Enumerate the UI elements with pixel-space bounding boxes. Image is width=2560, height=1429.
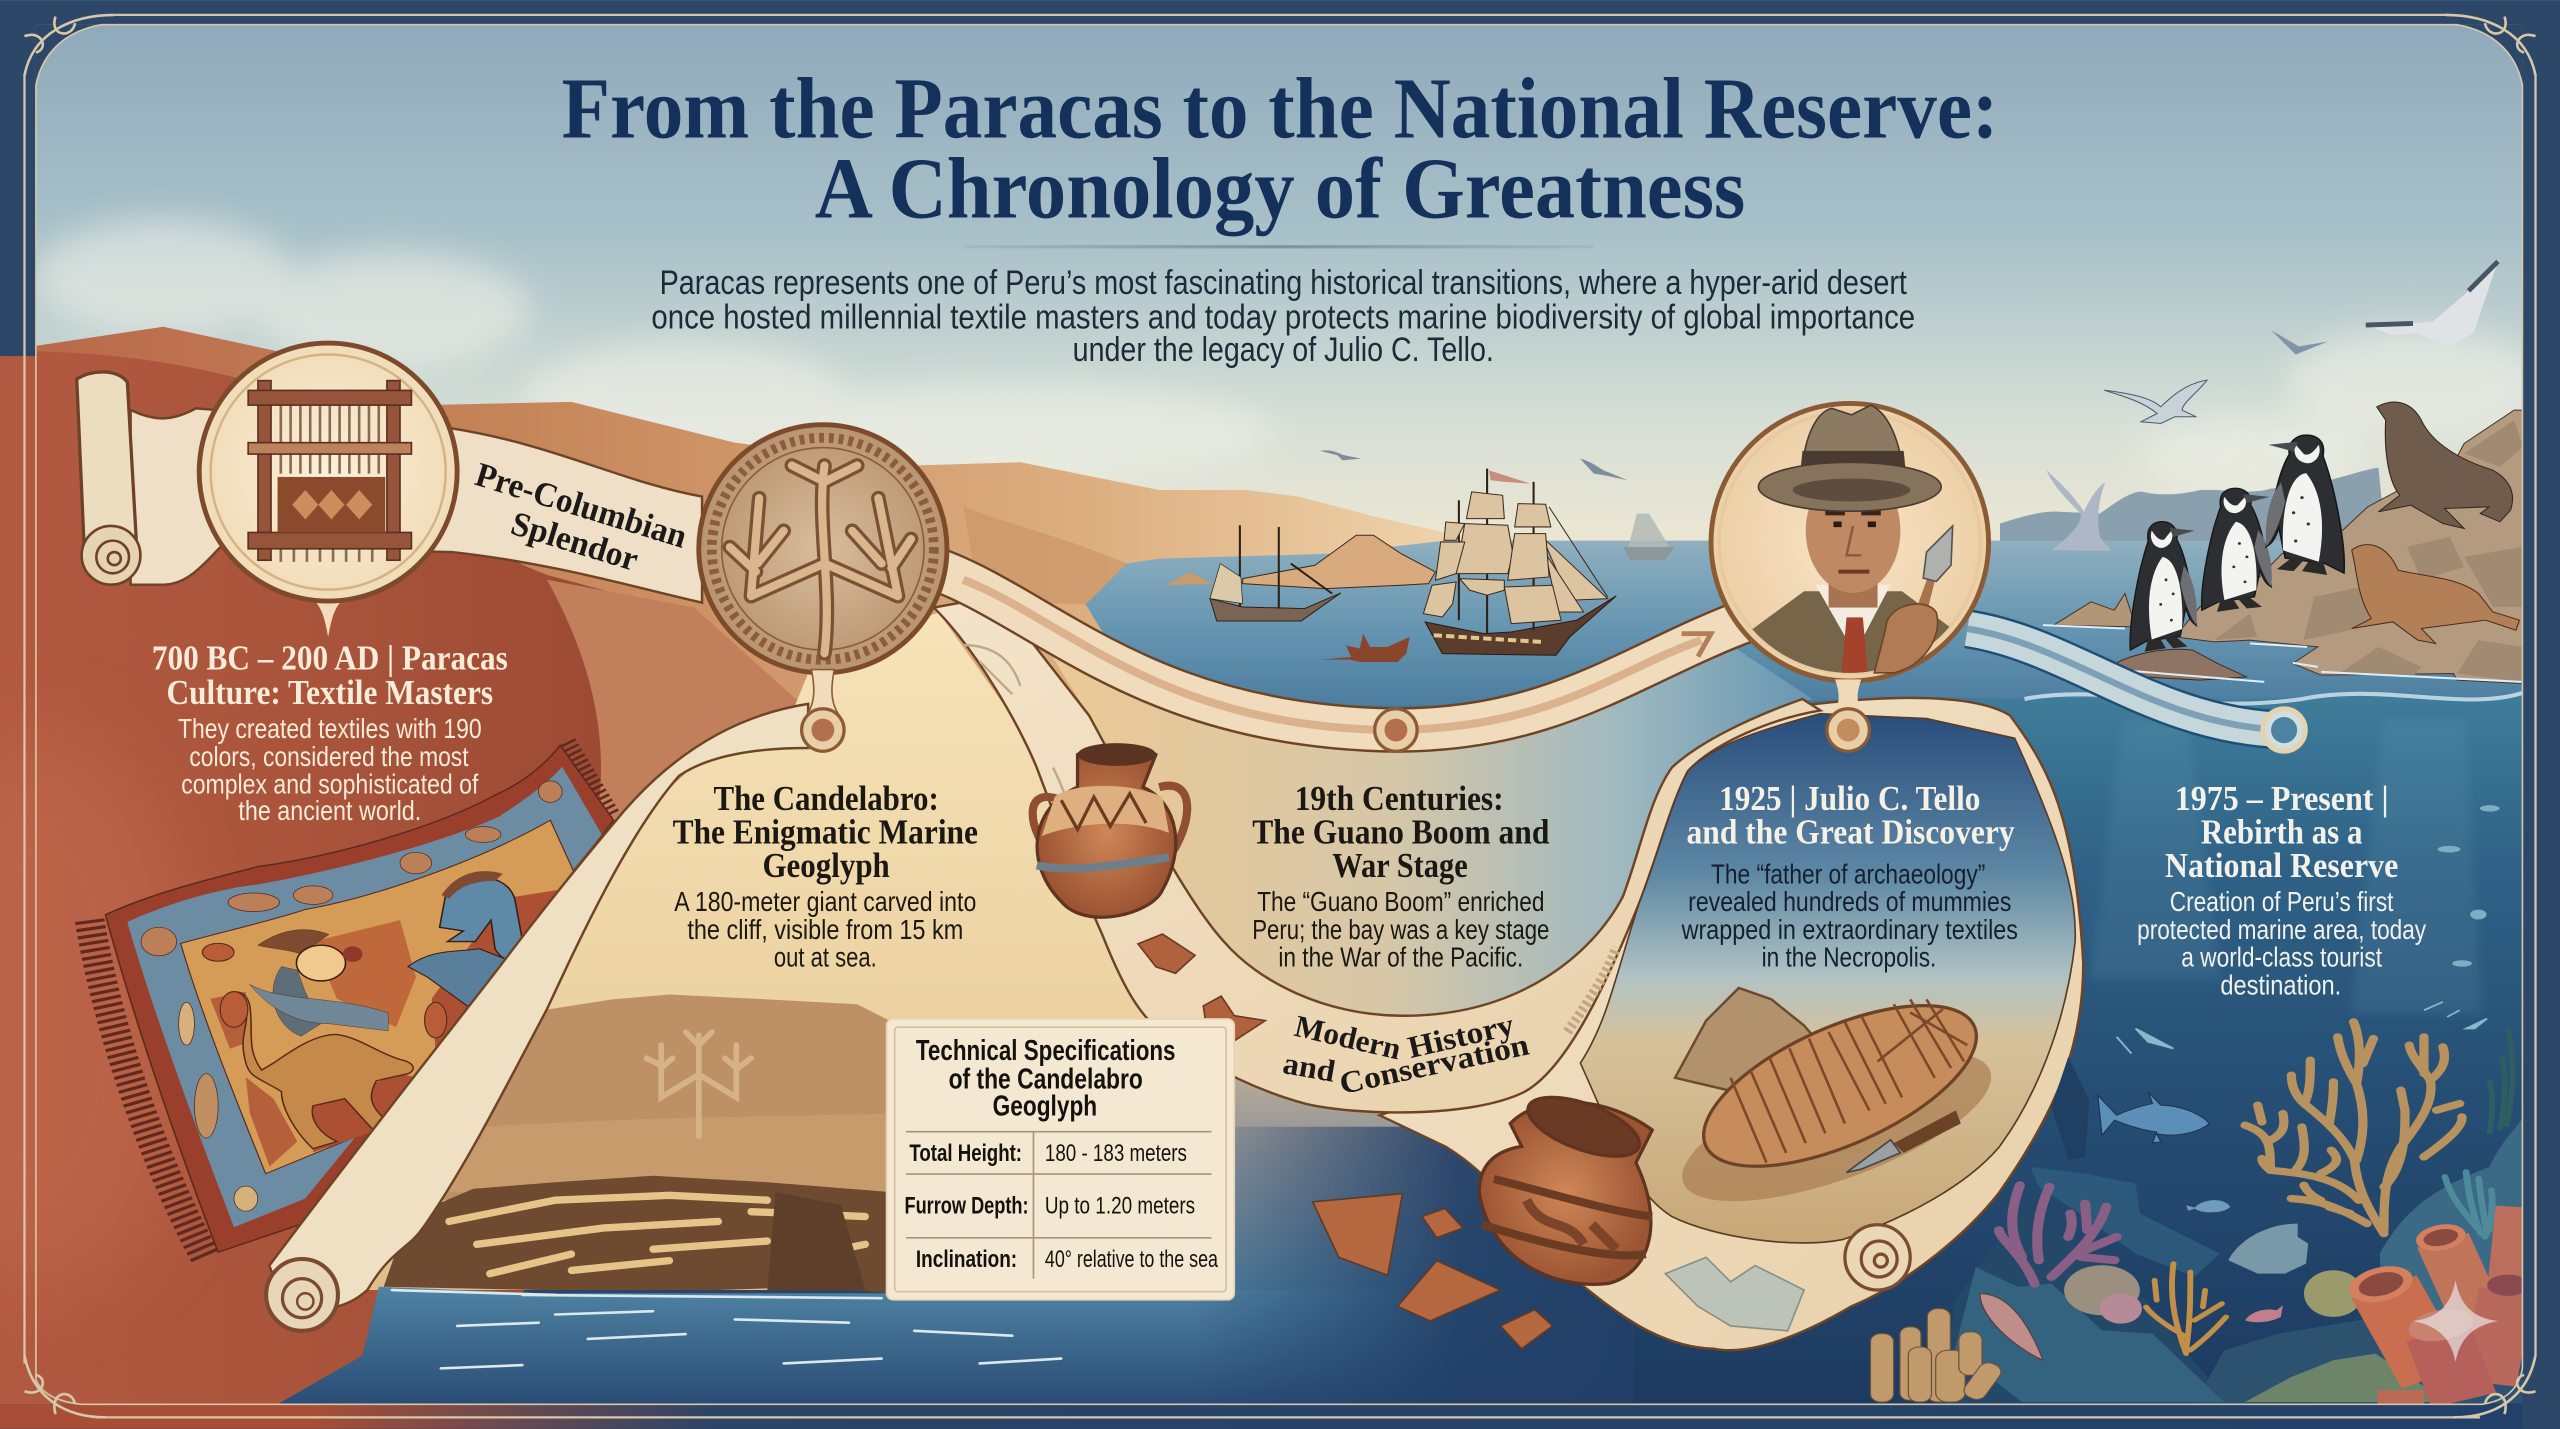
text block: 1925: [1681, 779, 2018, 973]
candelabra trident: [730, 466, 911, 653]
label: Modern History and Conservation: Modern: [1291, 1008, 1404, 1066]
sky background: [0, 0, 2560, 563]
penguin rock: [2112, 649, 2246, 680]
fish gray: [2228, 1224, 2308, 1274]
scroll curl: [266, 1259, 338, 1331]
beast head: [296, 945, 345, 981]
title: A Chronology of Greatness: [815, 140, 1745, 236]
facial features: [1825, 511, 1881, 514]
connector drip: [807, 670, 839, 715]
ribbon: pre-columbian band: [77, 372, 702, 603]
band: Modern History: [934, 596, 1820, 1112]
band motifs: [141, 781, 562, 1211]
underwater body: [1143, 693, 2531, 1408]
text block: 1925: in the Necropolis.: [1762, 942, 1936, 973]
neck and face: [1828, 584, 1878, 608]
scroll curl right: [1845, 1225, 1910, 1290]
text block: Candelabro: The Candelabro:: [713, 779, 939, 818]
wave highlights: [392, 1290, 1061, 1368]
sand crater under mummy: [1665, 1022, 2008, 1232]
rug blue band: [127, 767, 602, 1227]
table rows: 180 - 183 meters: [1045, 1141, 1187, 1167]
purple coral: [1999, 1185, 2117, 1284]
second figure body: [408, 949, 507, 1006]
shards lower: [1313, 1194, 1553, 1349]
woven cloth: [278, 477, 385, 532]
orange coral: [2146, 1264, 2226, 1354]
map sketch on band: [963, 645, 1086, 866]
darker cliff strata on the bay: [963, 506, 1127, 604]
text block: Candelabro: the cliff, visible from 15 km: [687, 914, 963, 945]
fish pink large: [1980, 1294, 2043, 1360]
scroll band over the textile: [266, 704, 808, 1331]
table rows: 40° relative to the sea: [1045, 1247, 1219, 1273]
penguin 1: [2130, 522, 2197, 652]
feather on band: [1567, 947, 1616, 1032]
timeline nodes: [802, 679, 2305, 751]
lower fill under band: [1110, 1045, 1633, 1408]
text block: 1975: Rebirth as a: [2201, 812, 2363, 851]
title: [562, 60, 1998, 236]
yellow sponge cluster: [2304, 1270, 2363, 1317]
table rows: Inclination:: [916, 1247, 1017, 1273]
hat: [1802, 405, 1904, 477]
clouds: [33, 219, 2547, 497]
table rows: Up to 1.20 meters: [1045, 1193, 1195, 1219]
card heading: Geoglyph: [993, 1090, 1097, 1122]
hill lower lighter slope: [428, 1114, 890, 1192]
node 1: [802, 709, 844, 751]
label: Modern History and Conservation: [1280, 1007, 1532, 1101]
text block: 1975: Creation of Peru’s first: [2170, 886, 2394, 917]
table rows: [904, 1141, 1219, 1273]
table rows: Total Height:: [909, 1141, 1022, 1167]
beast mane: [273, 967, 321, 1036]
text block: Candelabro: out at sea.: [774, 942, 877, 973]
foam: [2043, 625, 2521, 682]
label: Modern History and Conservation: History: [1404, 1007, 1518, 1065]
label: Pre-Columbian Splendor: Pre-Columbian: [471, 455, 691, 556]
seabird small: [2271, 330, 2328, 354]
pottery shards on band: [1138, 934, 1265, 1045]
text block: 1925: 1925 | Julio C. Tello: [1719, 779, 1980, 818]
sea at cliffs: [278, 1287, 1633, 1404]
bottom band: [0, 1404, 2560, 1429]
text block: 1975: protected marine area, today: [2137, 914, 2426, 945]
fish above reef: [2438, 805, 2500, 967]
rug field: [181, 820, 578, 1174]
amphora handles: [1033, 786, 1187, 866]
deep rock bottom right: [2195, 1317, 2523, 1404]
text block: Candelabro: The Enigmatic Marine: [673, 812, 978, 851]
sponge openings: [2343, 1220, 2529, 1346]
penguin 3: [2266, 435, 2344, 575]
text block: 700 BC: They created textiles with 190: [178, 713, 482, 744]
text block: 1975: destination.: [2220, 970, 2341, 1000]
card heading: [916, 1035, 1176, 1122]
node 2: [1375, 709, 1417, 751]
text block: 1925: and the Great Discovery: [1687, 812, 2015, 851]
text block: 700 BC: [152, 639, 508, 826]
text block: 1975: a world-class tourist: [2181, 942, 2382, 973]
trowel in hand: [1917, 572, 1936, 614]
scroll roll spiral: [82, 526, 140, 585]
red foreground ground: [0, 351, 849, 1404]
main rocks: [2175, 410, 2523, 684]
rug border: [105, 745, 614, 1252]
penguin 2: [2202, 488, 2272, 612]
sea lion light: [2352, 545, 2520, 644]
sketch of shells on scroll: [1665, 1257, 1804, 1331]
text block: 1975: [2137, 779, 2426, 1000]
label: Pre-Columbian Splendor: Splendor: [507, 504, 643, 579]
table rules: [906, 1132, 1211, 1279]
table card: technical specifications: [887, 1019, 1234, 1300]
distant ship: [1623, 514, 1675, 560]
text block: Guano Boom: 19th Centuries:: [1295, 779, 1504, 818]
coral scene: [1870, 1002, 2529, 1404]
large galleon: [1423, 469, 1616, 655]
amphora lower: [1479, 1085, 1652, 1284]
eroded cliffs: [384, 1176, 890, 1293]
suit: [1752, 591, 1950, 673]
blue rock: [2380, 1117, 2523, 1337]
archaeological trowel: [1847, 1110, 1961, 1172]
ribbon: water path: [1967, 629, 2286, 730]
rug top fringe: [568, 742, 614, 817]
left glow on red ground: [0, 735, 196, 1290]
big scroll 1925: [1380, 698, 2083, 1350]
desert hills: [0, 327, 1445, 768]
table rows: Furrow Depth:: [904, 1193, 1029, 1219]
text block: Guano Boom: in the War of the Pacific.: [1278, 942, 1523, 973]
text block: 1925: wrapped in extraordinary textiles: [1681, 914, 2018, 945]
text block: 700 BC: 700 BC – 200 AD | Paracas: [152, 639, 508, 678]
bottom dark mass: [1942, 1214, 2228, 1404]
text block: Guano Boom: War Stage: [1332, 846, 1468, 885]
rock beside mummy: [1675, 988, 1835, 1091]
dark rock column: [2051, 1057, 2089, 1160]
wildlife and rocks: [2000, 380, 2523, 684]
medallion 3: Julio C. Tello portrait: [1711, 403, 1989, 686]
ships group: [1165, 450, 1675, 662]
text block: Guano Boom: The “Guano Boom” enriched: [1257, 886, 1544, 917]
second figure crest: [442, 871, 503, 899]
mummy: [1682, 972, 1998, 1199]
boulder: [2064, 1265, 2140, 1315]
second figure head: [440, 878, 523, 960]
text block: 700 BC: the ancient world.: [238, 795, 421, 826]
bottom teal rocks: [1955, 1267, 2224, 1402]
fish blue large: [2098, 1092, 2209, 1143]
islet main: [1243, 535, 1435, 589]
intro paragraph: Paracas represents one of Peru’s most fascinating historical transitions, where a hyper-arid desert: [660, 264, 1907, 302]
beast tongue: [343, 946, 363, 962]
water surface line: [2024, 692, 2524, 704]
terracotta slope: [547, 580, 849, 849]
medallion 2: candelabra: [699, 425, 947, 715]
text block: 1975: 1975 – Present |: [2175, 779, 2389, 818]
intro paragraph: [651, 264, 1915, 369]
sea lion dark: [2377, 402, 2513, 528]
arrow chevron: [1682, 634, 1711, 657]
rug fringe: [90, 920, 206, 1259]
text block: Guano Boom: Peru; the bay was a key stage: [1252, 914, 1549, 945]
candelabra geoglyph: [647, 1032, 751, 1137]
teal back rocks: [2030, 1167, 2220, 1277]
text block: Guano Boom: [1252, 779, 1550, 973]
amphora upper: [1033, 743, 1187, 917]
light rays: [2090, 719, 2482, 1012]
node 4: [2263, 709, 2305, 751]
sandy hill with geoglyph: [416, 994, 890, 1200]
card heading: of the Candelabro: [949, 1063, 1143, 1095]
beast body: [222, 992, 413, 1149]
frame corner fills: [36, 25, 2522, 85]
text block: Candelabro: [673, 779, 978, 973]
tube sponges: [2384, 1207, 2519, 1404]
anemone: [2100, 1294, 2142, 1324]
text block: 1925: revealed hundreds of mummies: [1688, 886, 2011, 917]
medium ship: [1210, 525, 1341, 621]
rowboat: [1320, 634, 1410, 662]
small rock left: [2054, 594, 2136, 627]
panel: Candelabro background: [367, 612, 1234, 1290]
tan coral: [2245, 1022, 2462, 1234]
seabirds top right: [2271, 261, 2498, 354]
far bird 1: [1320, 450, 1361, 460]
text block: 700 BC: complex and sophisticated of: [181, 769, 479, 800]
small islet: [1165, 572, 1213, 585]
seabird middle: [2104, 380, 2207, 423]
fish pink small: [2245, 1305, 2283, 1322]
panel: Guano boom background: [1045, 645, 1812, 1016]
rock shading: [2214, 420, 2523, 682]
navy fade under band: [1192, 1127, 1633, 1408]
beast wing: [250, 984, 388, 1031]
label: Modern History and Conservation: Conservation: [1336, 1027, 1532, 1101]
card heading: Technical Specifications: [916, 1035, 1176, 1067]
sea and horizon: [1045, 541, 2560, 745]
text block: Candelabro: Geoglyph: [762, 846, 890, 885]
blue anemone: [2445, 1172, 2492, 1237]
text block: Guano Boom: The Guano Boom and: [1252, 812, 1550, 851]
small tube corals: [1870, 1309, 2005, 1402]
text block: 700 BC: colors, considered the most: [189, 741, 469, 772]
beast crest: [258, 930, 329, 954]
orange field shading: [313, 920, 416, 1027]
fish small: [2186, 1200, 2230, 1212]
label: Modern History and Conservation: and: [1280, 1045, 1338, 1089]
textile: [90, 742, 614, 1259]
node 3: [1827, 679, 1869, 751]
text block: 1925: The “father of archaeology”: [1711, 858, 1985, 889]
intro paragraph: once hosted millennial textile masters and today protects marine biodiversity of global importance: [651, 298, 1915, 336]
text block: Candelabro: A 180-meter giant carved into: [674, 886, 976, 917]
panel: 1925 background: [1580, 714, 2075, 1243]
shirt and tie: [1816, 584, 1890, 636]
text block: 700 BC: Culture: Textile Masters: [167, 673, 493, 712]
title: From the Paracas to the National Reserve:: [562, 60, 1998, 156]
distant right mountains: [2000, 467, 2386, 541]
title underline: [963, 245, 1593, 248]
loom warp threads: [281, 405, 379, 562]
medallion 1: loom: [199, 343, 457, 637]
far bird 2: [1580, 459, 1628, 480]
intro paragraph: under the legacy of Julio C. Tello.: [1073, 331, 1494, 369]
text block: 1975: National Reserve: [2165, 846, 2398, 885]
distant whale tail: [2046, 470, 2111, 551]
fish schools: [2117, 1002, 2487, 1054]
small motifs: [202, 943, 447, 1038]
watermark sparkle: [2413, 1280, 2498, 1362]
red background figure: [313, 888, 570, 1152]
ribbon: timeline path: [934, 568, 1755, 730]
loom frame: [248, 381, 411, 560]
seaweed right: [2489, 1029, 2513, 1134]
seabird large: [2366, 261, 2498, 346]
red lower field shading: [210, 992, 297, 1167]
scroll roll left: [77, 372, 137, 578]
green rock: [2245, 1354, 2447, 1402]
